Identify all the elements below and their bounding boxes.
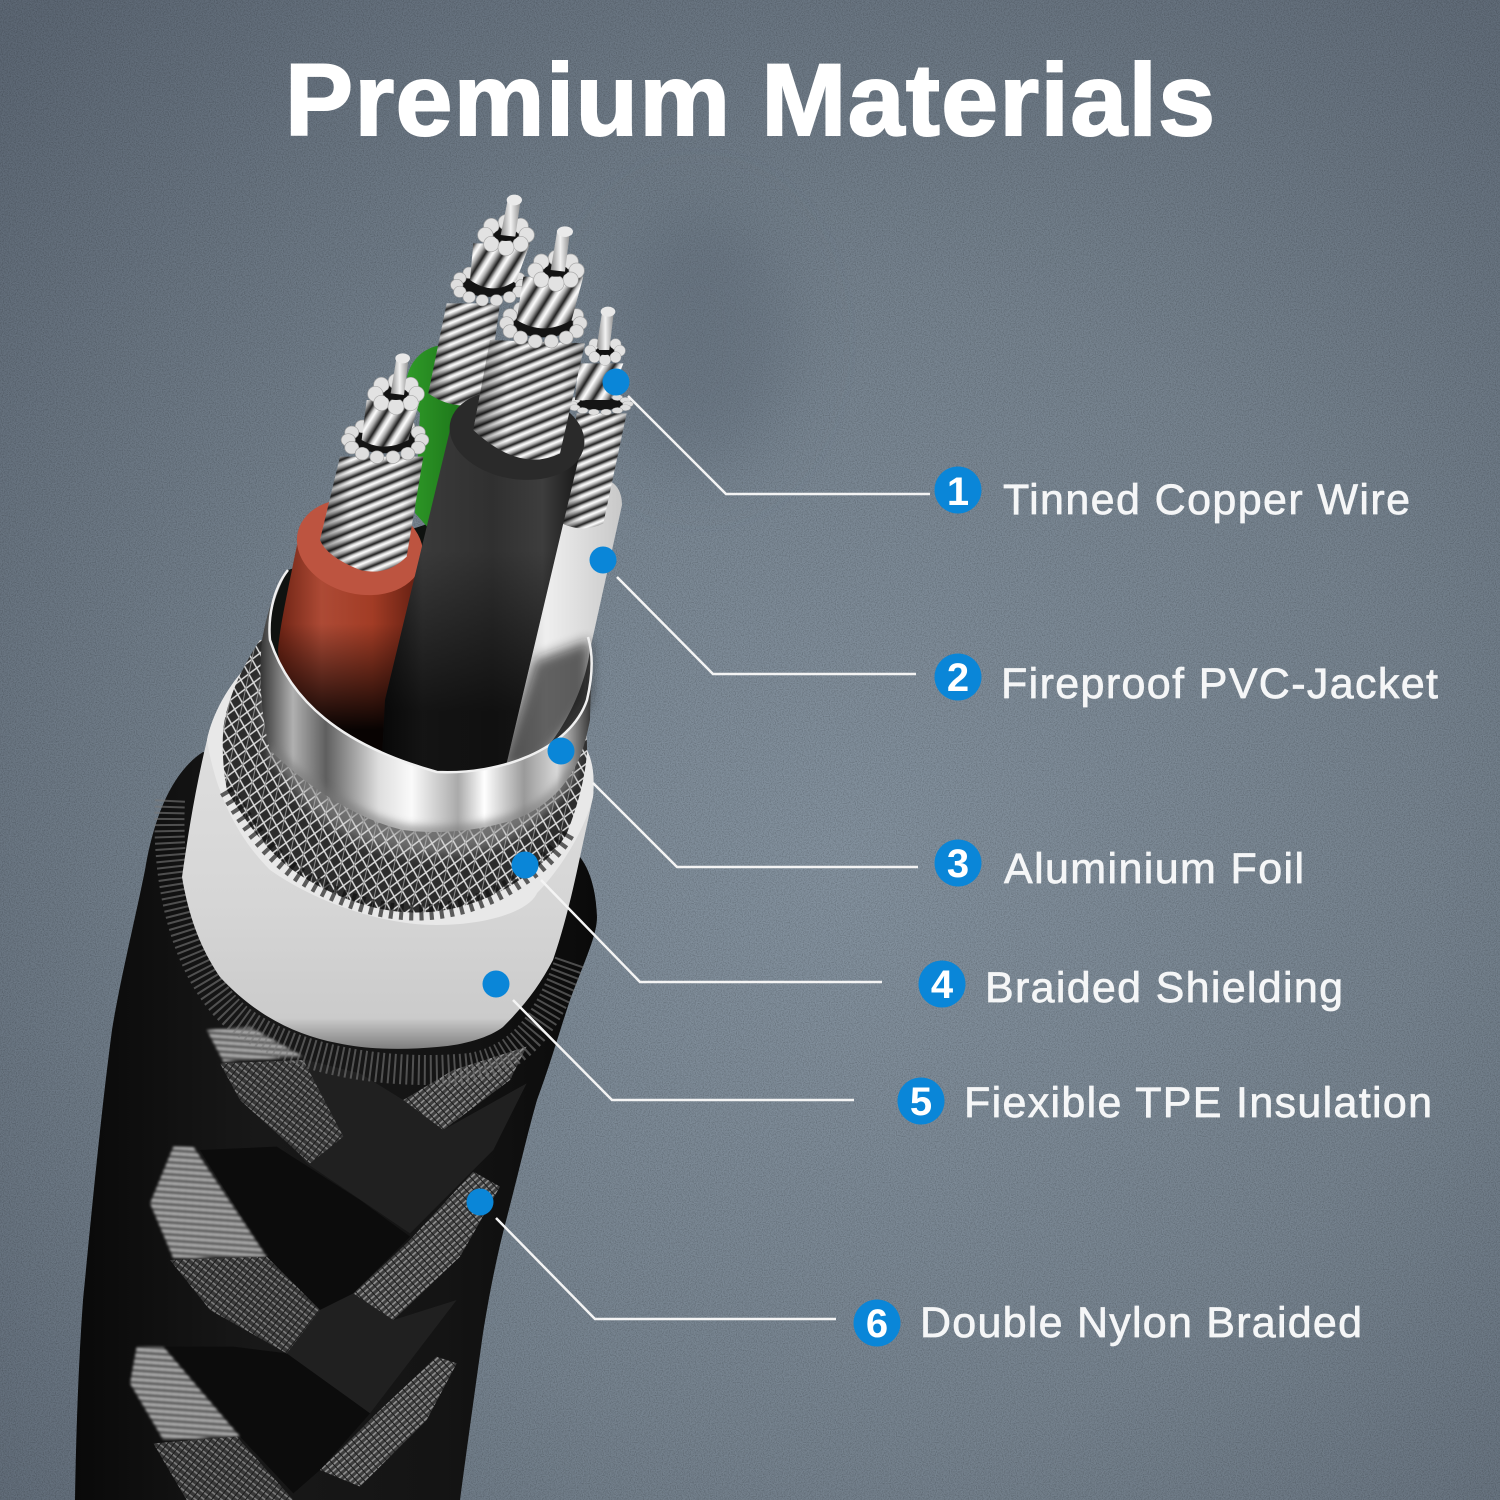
callout 6: double nylon braided: 6 <box>866 1302 888 1346</box>
wire strands: green, red and white conductors <box>320 195 633 572</box>
layer: flexible TPE insulation <box>182 663 594 1049</box>
callout 6: double nylon braided: Double Nylon Braided <box>920 1299 1362 1347</box>
callout 6: double nylon braided <box>466 1188 1362 1347</box>
title: Premium Materials <box>285 43 1215 157</box>
layer: double nylon braided jacket <box>75 752 597 1500</box>
callout 5: flexible TPE insulation: Fiexible TPE Insulation <box>964 1079 1432 1127</box>
callout 1: tinned copper wire <box>602 368 1410 524</box>
callout 1: tinned copper wire: Tinned Copper Wire <box>1003 476 1410 524</box>
callout 2: fireproof PVC jacket: 2 <box>947 656 969 700</box>
callout 5: flexible TPE insulation <box>482 970 1432 1127</box>
callout 5: flexible TPE insulation: 5 <box>910 1080 932 1124</box>
callout 1: tinned copper wire: 1 <box>947 470 969 514</box>
cable illustration <box>75 195 633 1500</box>
callout 3: aluminium foil: Aluminium Foil <box>1004 845 1304 893</box>
conductor: black jacket body <box>382 380 592 773</box>
callout 3: aluminium foil: 3 <box>947 842 969 886</box>
callout 4: braided shielding: Braided Shielding <box>985 964 1343 1012</box>
callout 2: fireproof PVC jacket: Fireproof PVC-Jacket <box>1001 660 1438 708</box>
conductor: white jacket body <box>495 478 622 770</box>
conductor: green wire body <box>407 345 500 530</box>
conductor: red jacket body <box>278 486 433 770</box>
wire strands: black conductor <box>473 226 587 460</box>
strands: red wire bundle <box>320 353 429 572</box>
strands: green wire bundle <box>428 195 534 405</box>
callout 4: braided shielding <box>512 852 1343 1012</box>
callout 3: aluminium foil <box>548 738 1304 893</box>
strands: white wire bundle <box>562 307 633 528</box>
layer: aluminium foil <box>270 500 592 772</box>
callout 4: braided shielding: 4 <box>931 963 954 1007</box>
layer: braided shielding <box>223 640 587 913</box>
layer: aluminium foil front band <box>260 570 592 832</box>
callout 2: fireproof PVC jacket <box>590 546 1438 708</box>
